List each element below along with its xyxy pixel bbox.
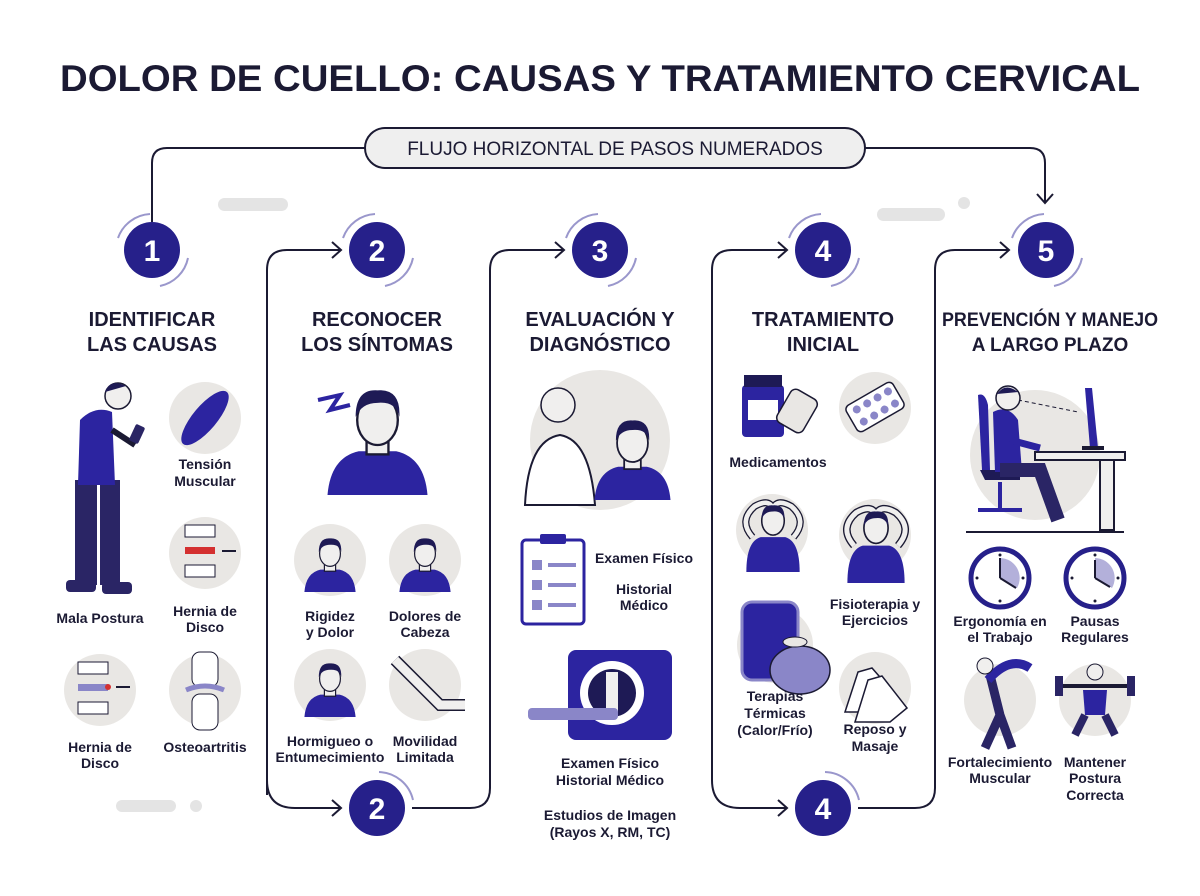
panel: symptoms: Hormigueo o bbox=[287, 733, 373, 749]
panel: symptoms: Dolores de bbox=[389, 608, 461, 624]
icon: arm bbox=[389, 649, 465, 721]
panel: prevention: Regulares bbox=[1061, 629, 1129, 645]
banner: flow label bbox=[365, 128, 865, 168]
decorative pills bbox=[116, 197, 970, 812]
headings: INICIAL bbox=[787, 334, 859, 356]
panel: causes: Muscular bbox=[174, 473, 236, 489]
panel: prevention: Fortalecimiento bbox=[948, 754, 1052, 770]
arrows: column connectors bbox=[267, 242, 1009, 816]
panel: prevention: Correcta bbox=[1066, 787, 1124, 803]
step circles: 1 bbox=[144, 235, 160, 268]
panel: treatment: Fisioterapia y bbox=[830, 596, 920, 612]
icon: MRI scanner bbox=[528, 650, 672, 740]
panel: symptoms: Limitada bbox=[396, 749, 454, 765]
icon: neck pain bbox=[318, 390, 428, 495]
icon: disc hernia 2 bbox=[64, 654, 136, 726]
panel: treatment: Medicamentos bbox=[729, 454, 827, 470]
panel: treatment: Terapias bbox=[747, 688, 803, 704]
panel: diagnosis: (Rayos X, RM, TC) bbox=[550, 824, 670, 840]
panel: treatment: Ejercicios bbox=[842, 612, 908, 628]
panel: causes: Disco bbox=[186, 619, 224, 635]
panel: symptoms bbox=[276, 390, 465, 765]
panel: causes: Disco bbox=[81, 755, 119, 771]
panel: treatment bbox=[729, 372, 920, 754]
panel: symptoms: Movilidad bbox=[393, 733, 457, 749]
icon: medicine bottle bbox=[742, 375, 819, 437]
panel: treatment: Térmicas bbox=[744, 705, 806, 721]
panel: symptoms: Rigidez bbox=[305, 608, 355, 624]
icon: muscle bbox=[169, 382, 241, 454]
icon: bad posture person bbox=[66, 383, 145, 594]
panel: treatment: Masaje bbox=[852, 738, 899, 754]
panel: diagnosis: Examen Físico bbox=[561, 755, 659, 771]
panel: diagnosis: Examen Físico bbox=[595, 550, 693, 566]
title: DOLOR DE CUELLO: CAUSAS Y TRATAMIENTO CERVICAL bbox=[60, 58, 1140, 99]
icon: stretching bbox=[964, 658, 1036, 748]
panel: treatment: Reposo y bbox=[843, 721, 907, 737]
step circles: 2 bbox=[369, 235, 385, 268]
panel: symptoms: y Dolor bbox=[306, 624, 355, 640]
headings: TRATAMIENTO bbox=[752, 309, 894, 331]
icon: clock 1 bbox=[971, 549, 1029, 607]
icon: massage hands bbox=[839, 652, 911, 724]
panel: causes: Hernia de bbox=[173, 603, 237, 619]
headings: EVALUACIÓN Y bbox=[525, 307, 675, 331]
panel: causes: Hernia de bbox=[68, 739, 132, 755]
panel: prevention: Muscular bbox=[969, 770, 1031, 786]
icon: clipboard bbox=[522, 534, 584, 624]
panel: diagnosis: Estudios de Imagen bbox=[544, 807, 676, 823]
step circles: 5 bbox=[1038, 235, 1054, 268]
panel: symptoms: Cabeza bbox=[400, 624, 450, 640]
icon: doctor and patient bbox=[525, 370, 670, 510]
headings: DIAGNÓSTICO bbox=[529, 332, 671, 356]
panel: prevention: Postura bbox=[1069, 770, 1121, 786]
icon: disc hernia bbox=[169, 517, 241, 589]
panel: diagnosis: Médico bbox=[620, 597, 668, 613]
headings: A LARGO PLAZO bbox=[972, 335, 1128, 356]
panel: causes: Mala Postura bbox=[56, 610, 144, 626]
icon: exercise 2 bbox=[839, 499, 911, 583]
headings: PREVENCIÓN Y MANEJO bbox=[942, 309, 1158, 331]
panel: causes: Osteoartritis bbox=[163, 739, 247, 755]
step circles: 4 bbox=[815, 793, 832, 826]
panel: prevention bbox=[948, 386, 1135, 803]
icon: stiffness bbox=[294, 524, 366, 596]
headings: LOS SÍNTOMAS bbox=[301, 333, 453, 356]
panel: diagnosis bbox=[522, 370, 693, 840]
icon: knee bbox=[169, 652, 241, 730]
headings: RECONOCER bbox=[312, 309, 443, 331]
icon: tingling bbox=[294, 649, 366, 721]
arrow: top flow line bbox=[152, 148, 1053, 222]
icon: headache bbox=[389, 524, 461, 596]
headings: IDENTIFICAR bbox=[89, 309, 216, 331]
panel: prevention: Ergonomía en bbox=[953, 613, 1047, 629]
icon: clock 2 bbox=[1066, 549, 1124, 607]
panel: treatment: (Calor/Frío) bbox=[737, 722, 813, 738]
banner: flow label: FLUJO HORIZONTAL DE PASOS NUMERADOS bbox=[407, 139, 823, 160]
step circles: 3 bbox=[592, 235, 608, 268]
icon: hot pack bbox=[737, 602, 830, 694]
headings: LAS CAUSAS bbox=[87, 334, 217, 356]
panel: causes: Tensión bbox=[179, 456, 231, 472]
panel: causes bbox=[56, 382, 247, 771]
headings bbox=[87, 307, 1158, 356]
panel: diagnosis: Historial Médico bbox=[556, 772, 664, 788]
step circles: 4 bbox=[815, 235, 832, 268]
icon: exercise 1 bbox=[736, 494, 808, 572]
icon: weightlifting bbox=[1055, 664, 1135, 736]
panel: prevention: Pausas bbox=[1070, 613, 1120, 629]
step circles: 2 bbox=[369, 793, 385, 826]
panel: prevention: el Trabajo bbox=[967, 629, 1033, 645]
icon: pill blister bbox=[839, 372, 911, 444]
panel: symptoms: Entumecimiento bbox=[276, 749, 384, 765]
step circles bbox=[118, 214, 1082, 836]
icon: ergonomic desk bbox=[966, 386, 1125, 532]
panel: diagnosis: Historial bbox=[616, 581, 672, 597]
panel: prevention: Mantener bbox=[1064, 754, 1127, 770]
